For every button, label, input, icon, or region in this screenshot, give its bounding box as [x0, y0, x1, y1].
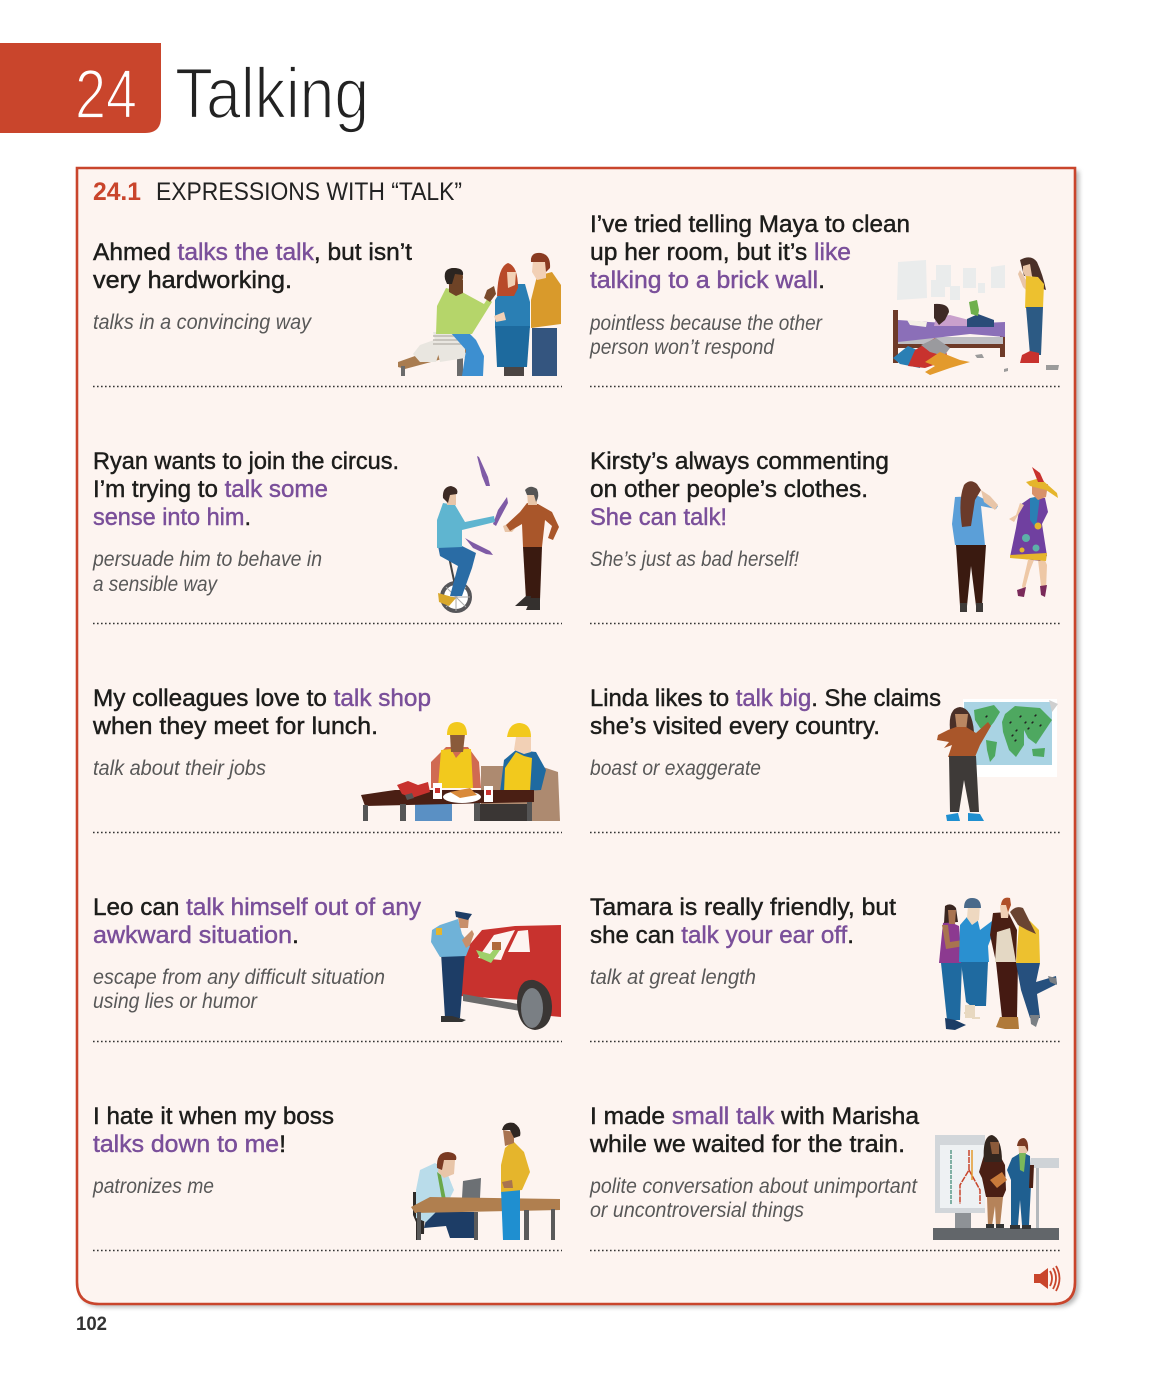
- title: Talking: [175, 55, 369, 134]
- example: she can talk: on other people’s clothes.: [590, 476, 868, 503]
- definition: pointless: pointless because the other: [589, 312, 823, 335]
- example: talks down to me: talks down to me !: [93, 1131, 286, 1158]
- example: talk big: she’s visited every country.: [590, 713, 880, 740]
- definition: escape: using lies or humor: [93, 990, 258, 1013]
- example: talk shop: [92, 685, 431, 740]
- example: talks the talk: very hardworking.: [93, 267, 292, 294]
- example: like talking to a brick wall: talking to a brick wall .: [590, 267, 825, 294]
- example: small talk: I made small talk with Marisha: [590, 1103, 920, 1130]
- definition: talk about their jobs: talk about their jobs: [93, 757, 266, 780]
- example: talks down to me: [93, 1103, 334, 1158]
- definition: persuade: a sensible way: [93, 573, 218, 596]
- panel: expressions with talk: [77, 168, 1079, 1307]
- example: talks down to me: I hate it when my boss: [93, 1103, 334, 1130]
- definition: talk at great length: talk at great length: [590, 966, 756, 989]
- illustration: boss and seated employee at desk: [411, 1123, 560, 1240]
- illustration: two women at a station map: [933, 1135, 1059, 1240]
- chapter number tab: [0, 43, 161, 133]
- example: talk your ear off: Tamara is really friendly, but: [590, 894, 896, 921]
- example: small talk: while we waited for the train.: [589, 1131, 905, 1158]
- definition: polite conversation: or uncontroversial things: [590, 1199, 804, 1222]
- example: like talking to a brick wall: [590, 211, 910, 294]
- definition: escape: [93, 966, 385, 1013]
- example: she can talk: [590, 448, 889, 531]
- definition: boast or exaggerate: boast or exaggerate: [590, 757, 761, 780]
- example: talk big: Linda likes to talk big. She claims: [590, 685, 941, 712]
- example: she can talk: Kirsty’s always commenting: [590, 448, 889, 475]
- definition: patronizes me: patronizes me: [92, 1175, 214, 1198]
- example: talk shop: My colleagues love to talk shop: [93, 685, 431, 712]
- section heading: 24.1: [93, 178, 141, 206]
- definition: escape: escape from any difficult situation: [93, 966, 385, 989]
- example: talk himself out: Leo can talk himself out of any: [93, 894, 421, 921]
- example: talk some sense into him: sense into him.: [93, 504, 251, 531]
- definition: pointless: [589, 312, 823, 359]
- example: talk your ear off: [590, 894, 896, 949]
- illustration: two women and a flamboyant dress: [952, 467, 1058, 612]
- example: she can talk: She can talk!: [590, 504, 727, 531]
- illustration: three people talking by a desk: [398, 253, 561, 376]
- example: talks the talk: Ahmed talks the talk, but isn’t: [93, 239, 412, 266]
- example: talk himself out: awkward situation .: [93, 922, 299, 949]
- illustration: group of four friends chatting: [939, 898, 1057, 1030]
- illustration: messy bedroom: [893, 257, 1059, 375]
- section heading: EXPRESSIONS WITH “TALK”: [156, 178, 462, 206]
- definition: persuade: [92, 548, 322, 596]
- example: talk some sense into him: Ryan wants to join the circus.: [93, 448, 399, 475]
- definition: persuade: persuade him to behave in: [92, 548, 322, 571]
- icon: audio speaker: [1034, 1266, 1060, 1291]
- example: talk some sense into him: [93, 448, 399, 531]
- definition: polite conversation: [589, 1175, 918, 1222]
- example: talk shop: when they meet for lunch.: [92, 713, 378, 740]
- page number: 102: [76, 1313, 107, 1335]
- illustration: unicycle juggler and friend: [437, 456, 559, 611]
- definition: talks in a convincing way: talks in a convincing way: [93, 311, 312, 334]
- definition: she's just as bad herself: She’s just as bad herself!: [590, 548, 799, 571]
- example: like talking to a brick wall: I’ve tried telling Maya to clean: [590, 211, 910, 238]
- definition: pointless: person won’t respond: [589, 336, 775, 359]
- example: talk big: [590, 685, 941, 740]
- example: talk himself out: [93, 894, 421, 949]
- chapter number tab: 24: [75, 55, 137, 133]
- illustration: woman pointing at world map: [937, 699, 1058, 821]
- illustration: policeman and driver in red car: [431, 911, 561, 1030]
- example: talk some sense into him: I’m trying to talk some: [93, 476, 328, 503]
- example: talk your ear off: she can talk your ear off.: [590, 922, 854, 949]
- illustration: construction workers at lunch: [361, 722, 560, 821]
- example: talks the talk: [93, 239, 412, 294]
- example: like talking to a brick wall: up her room, but it’s like: [590, 239, 851, 266]
- example: small talk: [589, 1103, 920, 1158]
- definition: polite conversation: polite conversation about unimportant: [589, 1175, 918, 1198]
